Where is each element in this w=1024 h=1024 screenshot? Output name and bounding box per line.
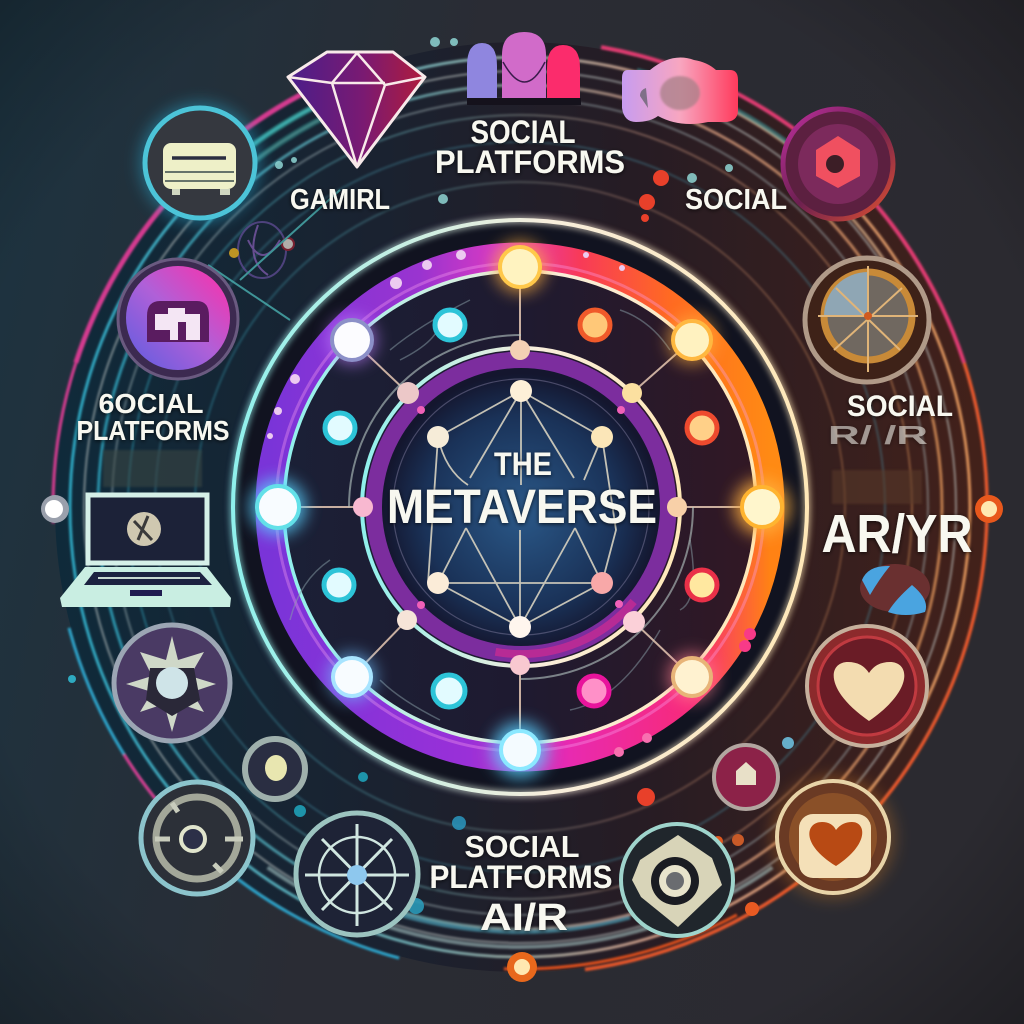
- coloured nodes: [324, 310, 717, 707]
- label: Social Platforms AR/R bottom: SOCIAL: [464, 829, 580, 864]
- label: Social right: [828, 390, 953, 450]
- title: METAVERSE: [387, 481, 657, 534]
- band dots: [267, 250, 756, 757]
- neon band: [270, 257, 770, 757]
- central metaverse hub: [233, 220, 807, 794]
- hub glow: [270, 257, 770, 757]
- scribble knot: [208, 190, 340, 320]
- icon: social fingers: [467, 32, 581, 105]
- icon: heart square: [771, 775, 895, 899]
- icon: purple social: [118, 259, 238, 379]
- inner cream nodes: [353, 340, 687, 675]
- ghost panel right: [832, 470, 922, 504]
- label: Social right: SOCIAL: [847, 390, 953, 423]
- icon: laptop: [60, 495, 231, 607]
- icon: compass: [805, 258, 929, 382]
- icon: ship wheel: [296, 813, 418, 935]
- ghost laptop left: [103, 450, 202, 487]
- label: Social right: R/ /R: [828, 420, 928, 450]
- inner arcs: [349, 335, 693, 679]
- title: THE: [494, 446, 552, 482]
- icon: chat cyan: [140, 103, 260, 223]
- label: Social Platforms left: PLATFORMS: [76, 415, 230, 446]
- faint arcs in band: [290, 300, 693, 720]
- icon: small house badge: [714, 745, 778, 809]
- icon: red hexagon: [783, 109, 893, 219]
- icon: shield flower: [114, 625, 230, 741]
- label: AR/YR: AR/YR: [822, 504, 972, 564]
- spokes: [278, 267, 762, 750]
- label: Gamir: GAMIRL: [290, 184, 390, 216]
- title: [387, 446, 657, 534]
- label: Social Platforms AR/R bottom: AI/R: [480, 897, 568, 939]
- label: Social top: SOCIAL: [470, 114, 576, 150]
- icon: diamond: [288, 52, 425, 167]
- label: Social Platforms left: [76, 388, 230, 446]
- ring nodes: [250, 241, 790, 778]
- scattered red dots: [637, 170, 782, 916]
- scattered teal dots: [68, 37, 794, 914]
- label: Platforms top: PLATFORMS: [435, 144, 625, 180]
- hub disc: [233, 220, 807, 794]
- rim glowing nodes: [41, 495, 1003, 982]
- label: Social Platforms AR/R bottom: PLATFORMS: [430, 859, 612, 895]
- label: Social top right: SOCIAL: [685, 184, 787, 216]
- icon: small round: [245, 739, 305, 799]
- label: Social Platforms left: 6OCIAL: [98, 388, 204, 419]
- label: Social Platforms AR/R bottom: [430, 829, 612, 939]
- central network mesh: [428, 391, 616, 627]
- icon: nut: [621, 824, 733, 936]
- icon: blue blob: [860, 564, 930, 615]
- icon: target ring: [141, 782, 253, 894]
- icon: heart circle: [807, 626, 927, 746]
- icon: pink link: [622, 58, 738, 124]
